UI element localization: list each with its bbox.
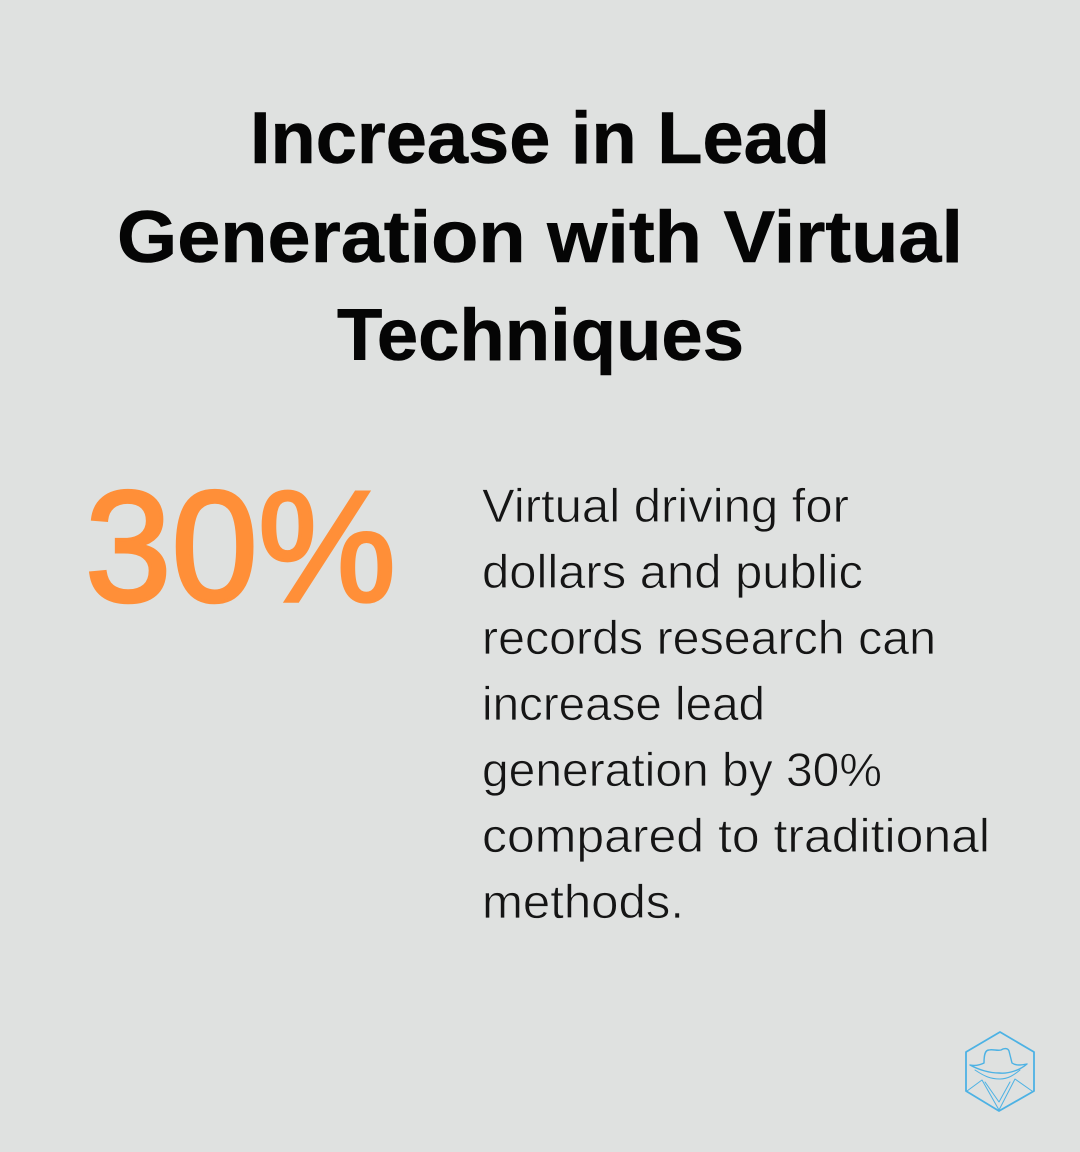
icon: hexagon logo with hat and coat bbox=[966, 1032, 1034, 1111]
description text: compared to traditional bbox=[482, 809, 990, 862]
description text: methods. bbox=[482, 875, 684, 928]
description text: Virtual driving for bbox=[482, 479, 849, 532]
icon part: hat bbox=[970, 1049, 1027, 1073]
icon part: hat shadow bbox=[975, 1070, 1020, 1079]
icon part: coat bbox=[967, 1079, 1032, 1110]
big stat: 30%: 30% bbox=[85, 459, 396, 635]
title: Increase in Lead bbox=[250, 98, 830, 179]
description text: records research can bbox=[482, 611, 936, 664]
title: Generation with Virtual bbox=[117, 197, 963, 278]
description text: dollars and public bbox=[482, 545, 863, 598]
icon part: hexagon outline bbox=[966, 1032, 1034, 1111]
title bbox=[117, 98, 963, 376]
title: Techniques bbox=[337, 295, 744, 376]
description text: generation by 30% bbox=[482, 743, 882, 796]
description text bbox=[482, 479, 990, 928]
description text: increase lead bbox=[482, 677, 765, 730]
